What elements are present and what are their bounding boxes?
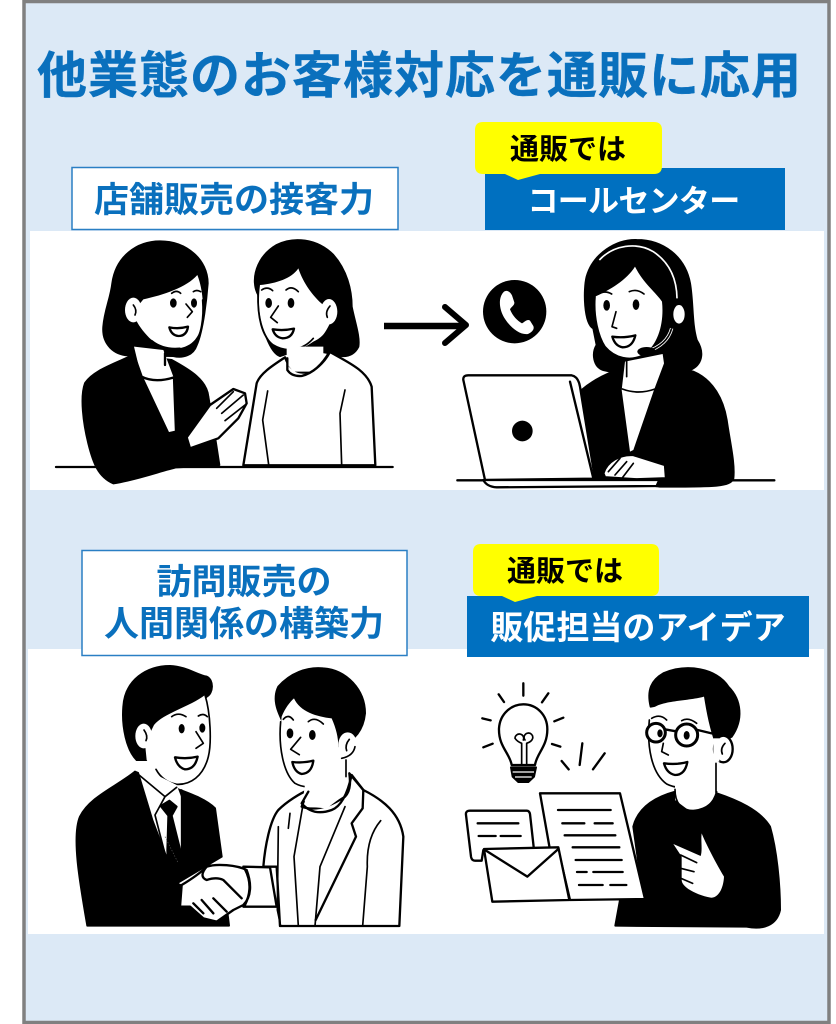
- table line: [457, 477, 774, 484]
- arrow: [384, 307, 466, 343]
- callout: by mail order (upper): 通販では: [510, 133, 626, 166]
- illustration: store clerk and customer: [56, 240, 393, 483]
- envelope: [484, 847, 569, 902]
- clerk: [83, 241, 247, 483]
- label: store sales: 店舗販売の接客力: [94, 181, 374, 220]
- operator: [582, 240, 734, 487]
- label: call center: [485, 168, 785, 230]
- label: promotion ideas: 販促担当のアイデア: [490, 609, 786, 646]
- laptop: [463, 375, 659, 487]
- label: promotion ideas: [467, 596, 809, 657]
- icon: light bulb: [482, 683, 605, 782]
- customer: [243, 240, 375, 465]
- table line: [56, 463, 393, 470]
- handshake: [180, 865, 277, 922]
- title: 他業態のお客様対応を通販に応用: [37, 48, 802, 104]
- document: [540, 793, 645, 900]
- salesman: [77, 666, 229, 926]
- callout: by mail order (upper): [475, 122, 662, 180]
- illustration: promoter with ideas: [466, 668, 780, 928]
- label: store sales: [72, 168, 398, 230]
- illustration: salesman shaking hands: [77, 666, 403, 926]
- panel: upper illustration band: [30, 231, 824, 490]
- label: call center: コールセンター: [527, 184, 740, 219]
- label: door-to-door sales: [82, 550, 407, 656]
- panel: lower illustration band: [28, 649, 824, 934]
- illustration: call center operator: [457, 240, 774, 487]
- label: door-to-door sales: 訪問販売の: [156, 563, 332, 602]
- colleague: [263, 668, 403, 926]
- presenter: [615, 668, 780, 928]
- note card: [466, 811, 534, 861]
- callout: by mail order (lower): [473, 544, 659, 602]
- label: door-to-door sales: 人間関係の構築力: [104, 605, 384, 644]
- callout: by mail order (lower): 通販では: [507, 555, 623, 588]
- icon: phone: [483, 280, 546, 343]
